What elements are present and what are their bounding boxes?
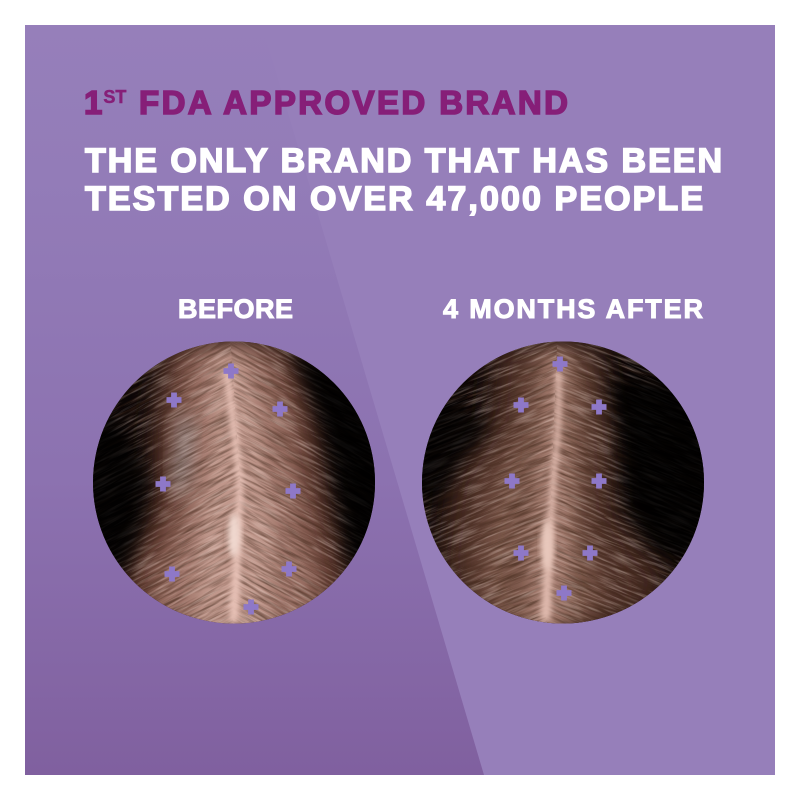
label: 4 months after: 4 MONTHS AFTER — [443, 294, 703, 324]
icons: plus markers after — [504, 356, 606, 600]
heading: 1st FDA approved brand: 1 — [84, 84, 102, 121]
heading: 1st FDA approved brand: ST — [103, 87, 126, 107]
heading: 1st FDA approved brand: FDA APPROVED BRAND — [139, 84, 568, 121]
headline: tested on over 47,000 people — [85, 142, 722, 218]
photo: scalp before — [93, 342, 375, 624]
icons: plus markers before — [156, 364, 300, 614]
headline: tested on over 47,000 people: TESTED ON OVER 47,000 PEOPLE — [85, 180, 703, 218]
label: before: BEFORE — [178, 294, 293, 324]
diagonal shaded area — [25, 25, 484, 775]
headline: tested on over 47,000 people: THE ONLY BRAND THAT HAS BEEN — [85, 142, 722, 180]
photo: scalp 4 months after — [422, 342, 704, 624]
